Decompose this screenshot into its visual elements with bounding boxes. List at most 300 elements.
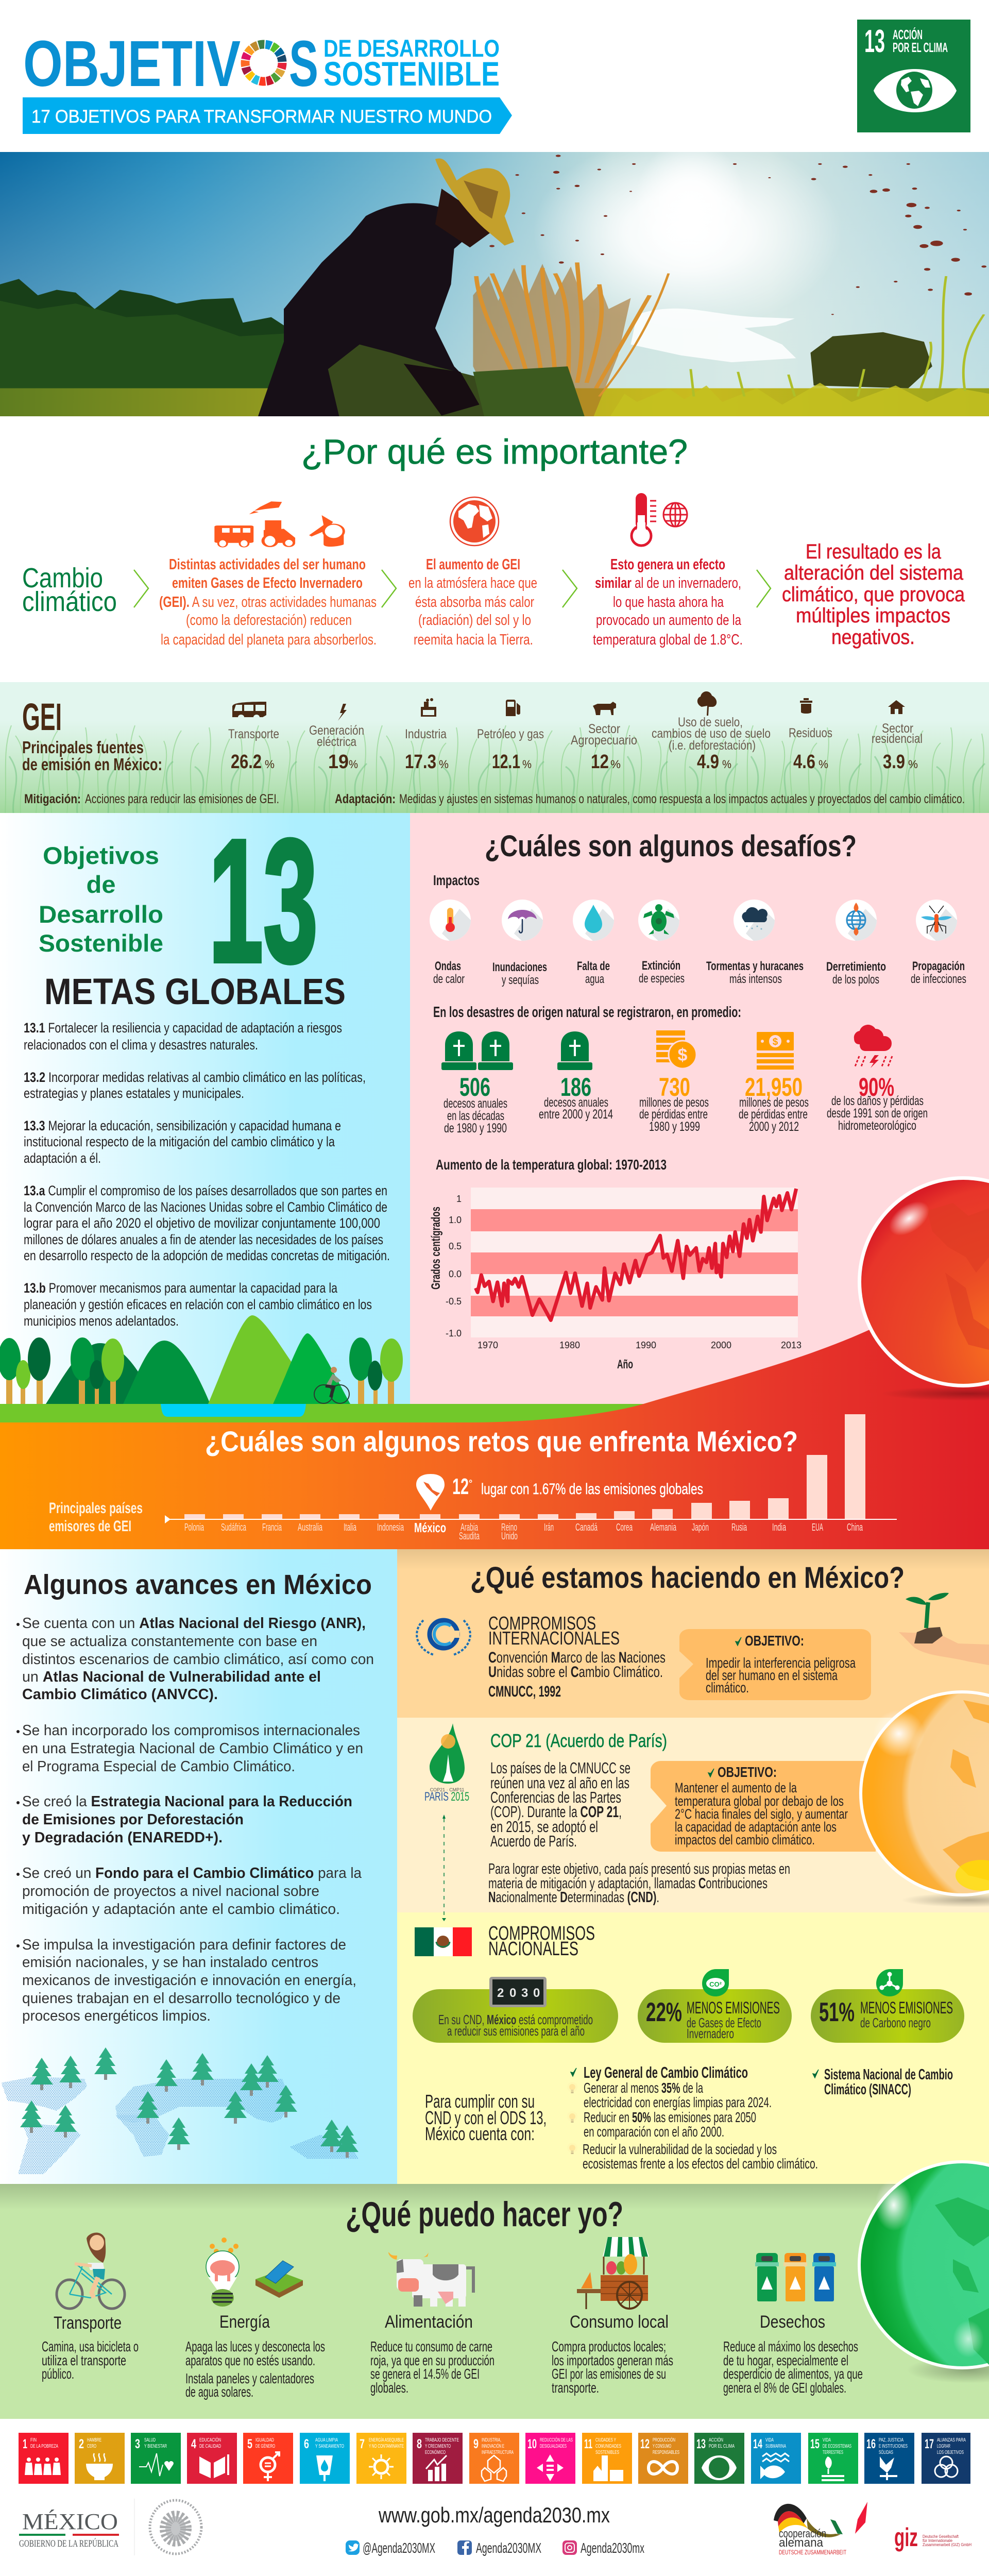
axis labels: -0.5 [446, 1296, 462, 1307]
stat: 21,950 millones: 2000 y 2012 [749, 1120, 799, 1134]
text block: metas 13.1 a 13.b: 13.1 Fortalecer la resiliencia y capacidad de adaptación a riesgos [24, 1020, 342, 1036]
callout: objetivo 2 [651, 1761, 876, 1852]
text block: efecto invernadero: lo que hasta ahora ha [613, 594, 724, 611]
tile: ODS 14: SUBMARINA [765, 2444, 786, 2449]
tile: ODS 10: 10 [527, 2437, 537, 2451]
text block: avances: procesos energéticos limpios. [22, 2008, 211, 2024]
social: Twitter: @Agenda2030MX [363, 2540, 435, 2556]
icon: contador 2030 [489, 1977, 547, 2007]
stat: 90% hidrometeorológico: de los daños y pérdidas [831, 1094, 924, 1108]
text block: metas 13.1 a 13.b: 13.2 Incorporar medidas relativas al cambio climático en las políticas, [24, 1070, 366, 1085]
text: compromisos nacionales: NACIONALES [488, 1938, 578, 1960]
heading: principales fuentes [22, 738, 162, 774]
icon: tormenta [734, 900, 785, 951]
tile: ODS 10 [525, 2433, 575, 2484]
stat: 506 decesos [441, 1031, 513, 1136]
stat: 506 decesos: de 1980 y 1990 [444, 1121, 507, 1136]
panel: COP 21: reúnen una vez al año en las [490, 1774, 629, 1792]
text: compromisos internacionales: INTERNACIONALES [488, 1628, 620, 1649]
text block: efecto invernadero: temperatura global de 1.8°C. [593, 632, 743, 648]
icon: termómetro y globo [632, 493, 687, 546]
stat: 186 decesos: 186 [560, 1073, 591, 1101]
panel: COP 21: en 2015, se adoptó el [490, 1818, 598, 1836]
header logo: Objetivos de Desarrollo Sostenible: SOSTENIBLE [323, 55, 500, 93]
text block: efecto invernadero: provocado un aumento de la [596, 612, 742, 629]
text block: resultado: alteración del sistema [784, 562, 964, 584]
heading: qué estamos haciendo: ¿Qué estamos haciendo en México? [470, 1561, 905, 1595]
sector percentages: 26.2 [231, 751, 262, 773]
labels: impactos: de especies [639, 972, 685, 986]
labels: impactos: Inundaciones [492, 960, 547, 974]
text block: actividades humanas: la capacidad del planeta para absorberlos. [161, 632, 377, 648]
callout: objetivo 1: Impedir la interferencia peligrosa [706, 1655, 856, 1671]
callout: México 12 lugar: 12 [452, 1474, 469, 1499]
sector labels: cambios de uso de suelo [652, 726, 771, 741]
text: energía: de agua solares. [185, 2384, 253, 2400]
tile: ODS 8: Y CRECIMIENTO [425, 2444, 451, 2449]
tile: ODS 1: DE LA POBREZA [30, 2444, 58, 2449]
label: principales países: Principales países [49, 1500, 143, 1517]
list: Ley General de Cambio Climático [567, 2063, 818, 2172]
stat: 730 millones: millones de pesos [639, 1095, 709, 1110]
text block: aumento de GEI: en la atmósfera hace que [408, 575, 537, 591]
labels: impactos: Derretimiento [826, 960, 886, 974]
country labels: Arabia [461, 1522, 479, 1533]
text: transporte: utiliza el transporte [42, 2352, 126, 2368]
panel: COP 21: Conferencias de las Partes [490, 1788, 621, 1806]
callout: objetivo 2: Mantener el aumento de la [675, 1780, 797, 1795]
text block: resultado: múltiples impactos [796, 604, 950, 627]
tile: ODS 15: 15 [810, 2437, 820, 2451]
axis labels: -1.0 [446, 1328, 462, 1338]
text: compromisos internacionales: Unidas sobre el Cambio Climático. [488, 1664, 663, 1681]
tile: ODS 13: POR EL CLIMA [709, 2444, 735, 2449]
icons: impactos [430, 900, 967, 951]
icon: ciclista [314, 1367, 349, 1403]
text block: avances: emisión nacionales, y se han instalado centros [22, 1954, 318, 1971]
social: Instagram: Agenda2030mx [581, 2540, 644, 2556]
text block: aumento de GEI: ésta absorba más calor [415, 594, 534, 611]
axis labels: Grados centígrados [429, 1207, 443, 1290]
panel: COP 21 [397, 1718, 989, 1912]
illustration: paisaje con montañas, árboles y ciclista [0, 1315, 403, 1404]
text block: avances: y Degradación (ENAREDD+). [22, 1829, 223, 1846]
stat: 186 decesos: decesos anuales [544, 1095, 608, 1110]
text block: resultado [782, 540, 965, 649]
text block: aumento de GEI [408, 556, 537, 648]
tile: ODS 4: EDUCACIÓN [199, 2436, 221, 2443]
stat: 90% hidrometeorológico [827, 1024, 928, 1133]
tile: ODS 3 [131, 2433, 181, 2484]
list: Ley General de Cambio Climático: Generar al menos 35% de la [584, 2080, 703, 2096]
text block: metas 13.1 a 13.b [24, 1020, 390, 1329]
bullets [16, 1623, 20, 1947]
ribbon: 17 objetivos: 17 OBJETIVOS PARA TRANSFORMAR NUESTRO MUNDO [31, 107, 492, 127]
pill: 51% menos emisiones: de Carbono negro [860, 2015, 931, 2030]
tile: ODS 6: AGUA LIMPIA [315, 2437, 338, 2443]
country labels: Unido [501, 1531, 518, 1542]
icon: derretimiento polos [835, 900, 887, 951]
ground: pasto y agua [0, 1404, 680, 1425]
label: principales países [49, 1500, 143, 1535]
text: contribuciones nacionales: materia de mitigación y adaptación, llamadas Contribuciones [488, 1875, 768, 1892]
sector labels: Sector [588, 722, 620, 736]
panel: GEI fuentes de emisión [0, 682, 989, 813]
tile: ODS 5: DE GÉNERO [255, 2443, 275, 2449]
text: contribuciones nacionales [488, 1861, 790, 1906]
callout: México 12 lugar: lugar con 1.67% de las emisiones globales [481, 1481, 703, 1498]
labels: impactos [433, 959, 966, 987]
text block: actividades humanas: (como la deforestación) reducen [186, 612, 352, 629]
tile: ODS 8: 8 [417, 2437, 422, 2451]
text block: metas 13.1 a 13.b: 13.a Cumplir el compromiso de los países desarrollados que son partes en [24, 1183, 387, 1198]
panel: COP 21: Los países de la CMNUCC se [490, 1759, 630, 1777]
stat: 186 decesos: entre 2000 y 2014 [539, 1107, 613, 1122]
tile: ODS 16 [864, 2433, 914, 2484]
tile: ODS 11: COMUNIDADES [595, 2444, 621, 2449]
text: alimentación: globales. [370, 2380, 408, 2396]
tile: ODS 2 [75, 2433, 125, 2484]
tile: ODS 5: 5 [247, 2437, 252, 2451]
stat: 506 decesos: en las décadas [447, 1109, 504, 1123]
heading: Objetivos de Desarrollo Sostenible: Desarrollo [39, 901, 163, 928]
band: retos que enfrenta México [0, 1288, 989, 1549]
tile: ODS 14 [751, 2433, 801, 2484]
tile: ODS 2: HAMBRE [87, 2437, 101, 2443]
chart: aumento de la temperatura global [429, 1157, 802, 1371]
illustration: mapa punteado con árboles [1, 2047, 359, 2174]
text block: metas 13.1 a 13.b: municipios menos adelantados. [24, 1313, 179, 1329]
callout: objetivo 2: temperatura global por debajo de los [675, 1793, 844, 1809]
labels: acciones [54, 2312, 825, 2333]
text block: avances: en una Estrategia Nacional de Cambio Climático y en [22, 1740, 363, 1757]
label: Cambio climático: climático [22, 586, 117, 617]
country labels: Corea [616, 1522, 633, 1533]
text: energía [185, 2338, 325, 2400]
logo: Gobierno de la República: MÉXICO [22, 2509, 118, 2534]
callout: México 12 lugar [416, 1474, 703, 1511]
sector percentages: 4.9 [697, 751, 719, 773]
illustration: globo rojo [858, 1176, 989, 1401]
text block: efecto invernadero: Esto genera un efecto [610, 556, 725, 573]
labels: impactos: Tormentas y huracanes [706, 959, 804, 973]
tile: ODS 10: DESIGUALDADES [540, 2444, 567, 2449]
tile: ODS 11 [582, 2433, 632, 2484]
tile: ODS 8: TRABAJO DECENTE [425, 2437, 459, 2443]
text: alimentación [370, 2338, 494, 2396]
text: consumo local [552, 2338, 673, 2396]
text block: metas 13.1 a 13.b: institucional respecto de la mitigación del cambio climático y la [24, 1134, 335, 1149]
icon: inundaciones [502, 900, 553, 951]
sector percentages [231, 751, 918, 773]
tile: ODS 2: CERO [87, 2444, 96, 2449]
social: Instagram [562, 2540, 644, 2556]
icon: ondas de calor [430, 900, 481, 951]
sector percentages: 17.3 [405, 751, 436, 773]
header logo: Objetivos de Desarrollo Sostenible: OBJETIV [23, 27, 241, 100]
axis labels: 2013 [781, 1340, 802, 1350]
badge: ODS 13 acción por el clima [857, 20, 970, 132]
axis labels: 1 [456, 1194, 462, 1204]
text block: avances: un Atlas Nacional de Vulnerabilidad ante el [22, 1669, 321, 1685]
sector labels: Residuos [789, 726, 832, 740]
stat: 506 decesos: decesos anuales [444, 1096, 507, 1111]
sector labels [228, 715, 923, 753]
tile: ODS 9: INNOVACIÓN E [482, 2443, 504, 2449]
country labels: Sudáfrica [221, 1522, 247, 1533]
heading: Objetivos de Desarrollo Sostenible [39, 842, 163, 957]
pill: reducción para 2030 [413, 1977, 618, 2043]
stat: 21,950 millones: de pérdidas entre [739, 1107, 808, 1122]
pill: reducción para 2030: a reducir sus emisiones para el año [447, 2023, 585, 2039]
tile: ODS 14: VIDA [765, 2437, 774, 2443]
callout: objetivo 1: climático. [706, 1680, 749, 1696]
text block: metas 13.1 a 13.b: 13.3 Mejorar la educación, sensibilización y capacidad humana e [24, 1118, 341, 1133]
icon: logo CMNUCC [417, 1620, 470, 1655]
icon: mosquito [916, 900, 967, 951]
sector labels: (i.e. deforestación) [669, 738, 756, 753]
strip: 17 iconos ODS [19, 2433, 970, 2484]
text block: efecto invernadero: similar al de un invernadero, [595, 575, 741, 591]
sector percentages: 3.9 [883, 751, 905, 773]
text: compromisos internacionales: COMPROMISOS [488, 1613, 596, 1634]
list: Ley General de Cambio Climático: ecosistemas frente a los efectos del cambio climático. [583, 2156, 818, 2172]
text: compromisos nacionales: COMPROMISOS [488, 1923, 595, 1944]
tile: ODS 10: REDUCCIÓN DE LAS [540, 2436, 573, 2443]
text block: avances: promoción de proyectos a nivel nacional sobre [22, 1883, 319, 1900]
tile: ODS 12: RESPONSABLES [653, 2450, 679, 2455]
text: para cumplir con su CND: Para cumplir con su [425, 2091, 535, 2112]
text: para cumplir con su CND: CND y con el ODS 13, [425, 2107, 547, 2128]
label: Cambio climático [22, 563, 117, 617]
tile: ODS 17 [922, 2433, 970, 2484]
sector percentages: % [522, 758, 532, 771]
text: consumo local: GEI por las emisiones de su [552, 2366, 666, 2382]
callout: objetivo 1: OBJETIVO: [745, 1633, 804, 1649]
labels: acciones: Energía [219, 2312, 270, 2332]
tile: ODS 13 [694, 2433, 744, 2484]
sector percentages: % [722, 758, 731, 771]
tile: ODS 16: E INSTITUCIONES [879, 2444, 908, 2449]
logo: cooperación alemana: DEUTSCHE ZUSAMMENARBEIT [779, 2549, 846, 2556]
text: desechos [723, 2338, 863, 2396]
icon: ciclista mujer [57, 2232, 125, 2309]
text block: metas 13.1 a 13.b: planeación y gestión eficaces en relación con el cambio climático en los [24, 1297, 372, 1312]
pill: 51% menos emisiones: 51% [819, 1997, 855, 2027]
text block: resultado: El resultado es la [806, 540, 942, 563]
callout: objetivo 1 [679, 1629, 871, 1700]
text block: avances: mitigación y adaptación ante el cambio climático. [22, 1901, 340, 1918]
heading: metas globales: METAS GLOBALES [44, 972, 346, 1012]
labels: impactos: de los polos [832, 973, 879, 987]
bar chart: países emisores [165, 1414, 897, 1542]
country labels: India [772, 1522, 787, 1533]
axis labels: 2000 [711, 1340, 731, 1350]
icon: bandera de México [415, 1927, 472, 1956]
stat: 730 millones: 1980 y 1999 [649, 1120, 700, 1134]
text: desechos: genera el 8% de GEI globales. [723, 2380, 846, 2396]
tile: ODS 6: 6 [304, 2437, 309, 2451]
panel: COP 21: (COP). Durante la COP 21, [490, 1803, 622, 1821]
tile: ODS 1 [19, 2433, 69, 2484]
photo: campesino con arroz [0, 134, 989, 424]
text block: aumento de GEI: reemita hacia la Tierra. [414, 632, 533, 648]
country labels: Italia [344, 1522, 357, 1533]
panel: desafíos background [410, 813, 989, 1405]
axis labels: 1980 [559, 1340, 580, 1350]
social: Twitter [346, 2540, 435, 2556]
tile: ODS 11: SOSTENIBLES [595, 2450, 619, 2455]
icon: gota CO2 [702, 1969, 729, 1996]
axis labels: 1.0 [449, 1215, 462, 1225]
sector percentages: 12.1 [492, 751, 520, 773]
text block: avances: distintos escenarios de cambio climático, así como con [22, 1651, 374, 1668]
axis labels [429, 1194, 802, 1371]
stat: 506 decesos: 506 [459, 1073, 490, 1101]
text block: metas 13.1 a 13.b: la Convención Marco de las Naciones Unidas sobre el Cambio Climático de [24, 1199, 387, 1215]
text: alimentación: se genera el 14.5% de GEI [370, 2366, 480, 2382]
pill: 22% menos emisiones [638, 1969, 792, 2043]
text: alimentación: roja, ya que en su producción [370, 2352, 494, 2368]
text block: avances: Se han incorporado los compromisos internacionales [22, 1722, 360, 1739]
panel: qué puedo hacer yo [0, 2184, 989, 2419]
country labels: Polonia [184, 1522, 204, 1533]
link: sitio web: www.gob.mx/agenda2030.mx [378, 2503, 610, 2527]
icon: tortuga [638, 900, 690, 951]
badge: ODS 13 acción por el clima: POR EL CLIMA [893, 40, 948, 55]
country labels: Alemania [650, 1522, 677, 1533]
text block: avances: mexicanos de investigación e innovación en energía, [22, 1972, 356, 1989]
definitions: mitigación y adaptación [24, 792, 965, 806]
icon: contenedores de reciclaje [755, 2253, 836, 2301]
tile: ODS 3: 3 [135, 2437, 140, 2451]
text: contribuciones nacionales: Para lograr este objetivo, cada país presentó sus propias metas en [488, 1861, 790, 1877]
text block: metas 13.1 a 13.b: en desarrollo respecto de la adopción de medidas concretas de mitigación. [24, 1248, 390, 1263]
sector labels: Petróleo y gas [477, 727, 544, 741]
text block: avances: que se actualiza constantemente con base en [22, 1633, 317, 1650]
illustration: globo amarillo [859, 1690, 989, 1907]
stat: 21,950 millones: $ [773, 1037, 778, 1047]
tile: ODS 11: CIUDADES Y [595, 2437, 616, 2443]
labels: acciones: Desechos [760, 2312, 825, 2332]
tile: ODS 14: 14 [753, 2437, 762, 2451]
icon: vaca [388, 2252, 473, 2307]
country labels: Rusia [731, 1522, 747, 1533]
social: Facebook: Agenda2030MX [476, 2540, 541, 2556]
icon: logo COP21 París 2015: PARIS 2015 [424, 1790, 469, 1804]
list: Sistema Nacional de Cambio Climático: Climático (SINACC) [824, 2081, 911, 2098]
callout: objetivo 2: la capacidad de adaptación ante los [675, 1819, 837, 1835]
panel: compromisos internacionales [397, 1549, 989, 1718]
heading: retos: ¿Cuáles son algunos retos que enfrenta México? [205, 1425, 798, 1458]
text: desechos: desperdicio de alimentos, ya que [723, 2366, 863, 2382]
pill: 51% menos emisiones [811, 1969, 964, 2043]
country labels: Irán [544, 1522, 554, 1533]
labels: impactos: de infecciones [911, 972, 966, 986]
axis labels: 0.5 [449, 1241, 462, 1251]
callout: objetivo 1: del ser humano en el sistema [706, 1667, 838, 1683]
tile: ODS 2: 2 [79, 2437, 84, 2451]
labels: impactos: Falta de [577, 959, 610, 973]
sector percentages: % [439, 758, 449, 771]
country labels: Canadá [575, 1522, 598, 1533]
text block: metas 13.1 a 13.b: lograr para el año 2020 el objetivo de movilizar conjuntamente 100,000 [24, 1215, 380, 1231]
heading: qué puedo hacer yo: ¿Qué puedo hacer yo? [346, 2195, 623, 2234]
tile: ODS 17: ALIANZAS PARA [937, 2437, 966, 2443]
sector percentages: % [349, 758, 358, 771]
tile: ODS 7: 7 [360, 2437, 365, 2451]
icon: gota CO2: CO² [709, 1980, 722, 1988]
country labels: Indonesia [377, 1522, 404, 1533]
tile: ODS 15: DE ECOSISTEMAS [823, 2444, 851, 2449]
tile: ODS 6: Y SANEAMIENTO [315, 2444, 344, 2449]
list: Ley General de Cambio Climático: Reducir la vulnerabilidad de la sociedad y los [583, 2141, 777, 2157]
icon: mano con planta [899, 1593, 989, 1665]
icon: logo COP21 París 2015 [424, 1723, 469, 1804]
text: energía: aparatos que no estés usando. [185, 2352, 315, 2368]
text block: actividades humanas [159, 556, 377, 648]
tile: ODS 1: FIN [30, 2437, 37, 2443]
definitions: mitigación y adaptación: Mitigación: [24, 792, 81, 806]
text block: actividades humanas: (GEI). A su vez, otras actividades humanas [159, 594, 377, 611]
icon: escudo nacional [150, 2500, 201, 2554]
text: desechos: de tu hogar, especialmente el [723, 2352, 848, 2368]
sector labels: Agropecuario [571, 733, 637, 748]
pill: 22% menos emisiones: de Gases de Efecto [687, 2015, 761, 2030]
text: consumo local: Compra productos locales; [552, 2338, 666, 2354]
stat: 90% hidrometeorológico: 90% [859, 1073, 894, 1101]
text block: aumento de GEI: (radiación) del sol y lo [418, 612, 531, 629]
logo: giz: Zusammenarbeit (GIZ) GmbH [923, 2543, 971, 2547]
stat: 90% hidrometeorológico: hidrometeorológico [838, 1118, 916, 1133]
badge: ODS 13 acción por el clima: 13 [864, 24, 885, 59]
chart title: Aumento de la temperatura global: 1970-2013 [436, 1157, 667, 1173]
pill: reducción para 2030: En su CND, México está comprometido [438, 2012, 593, 2027]
tile: ODS 17: 17 [925, 2437, 934, 2451]
list: Ley General de Cambio Climático: en comparación con el año 2000. [584, 2124, 724, 2140]
text: contribuciones nacionales: Nacionalmente Determinadas (CND). [488, 1889, 659, 1906]
sector percentages: % [265, 758, 275, 771]
text block: avances [22, 1615, 374, 2024]
tile: ODS 13: 13 [696, 2437, 706, 2451]
country labels: Reino [501, 1522, 517, 1533]
pill: 22% menos emisiones: Invernadero [687, 2026, 734, 2041]
stat: 730 millones: de pérdidas entre [639, 1107, 708, 1122]
text: transporte [42, 2338, 139, 2382]
axis labels: 1990 [636, 1340, 656, 1350]
text: para cumplir con su CND [425, 2091, 547, 2144]
labels: impactos: Ondas [435, 959, 461, 973]
icon: gota carbono negro [876, 1969, 903, 1996]
tile: ODS 7: ENERGÍA ASEQUIBLE [369, 2436, 404, 2443]
icon: logo COP21 París 2015: COP21 · CMP11 [430, 1787, 464, 1792]
icons: transporte, tractor, hacha [214, 501, 344, 547]
text block: metas 13.1 a 13.b: adaptación a él. [24, 1150, 101, 1166]
logo: cooperación alemana: alemana [779, 2536, 824, 2550]
icon: globo terráqueo rojo [450, 497, 499, 546]
tile: ODS 4: 4 [191, 2437, 196, 2451]
tile: ODS 1: 1 [23, 2437, 27, 2451]
definitions: mitigación y adaptación: Acciones para reducir las emisiones de GEI. [85, 792, 279, 806]
tile: ODS 16: 16 [866, 2437, 876, 2451]
heading: Por qué es importante: ¿Por qué es importante? [301, 432, 688, 471]
labels: acciones: Alimentación [385, 2312, 473, 2332]
text block: resultado: negativos. [831, 626, 915, 649]
logo: giz [894, 2523, 971, 2552]
panel: metas globales background [0, 813, 410, 1405]
number: 13: 13 [209, 803, 318, 999]
heading: cuáles son algunos desafíos: ¿Cuáles son algunos desafíos? [485, 829, 857, 863]
